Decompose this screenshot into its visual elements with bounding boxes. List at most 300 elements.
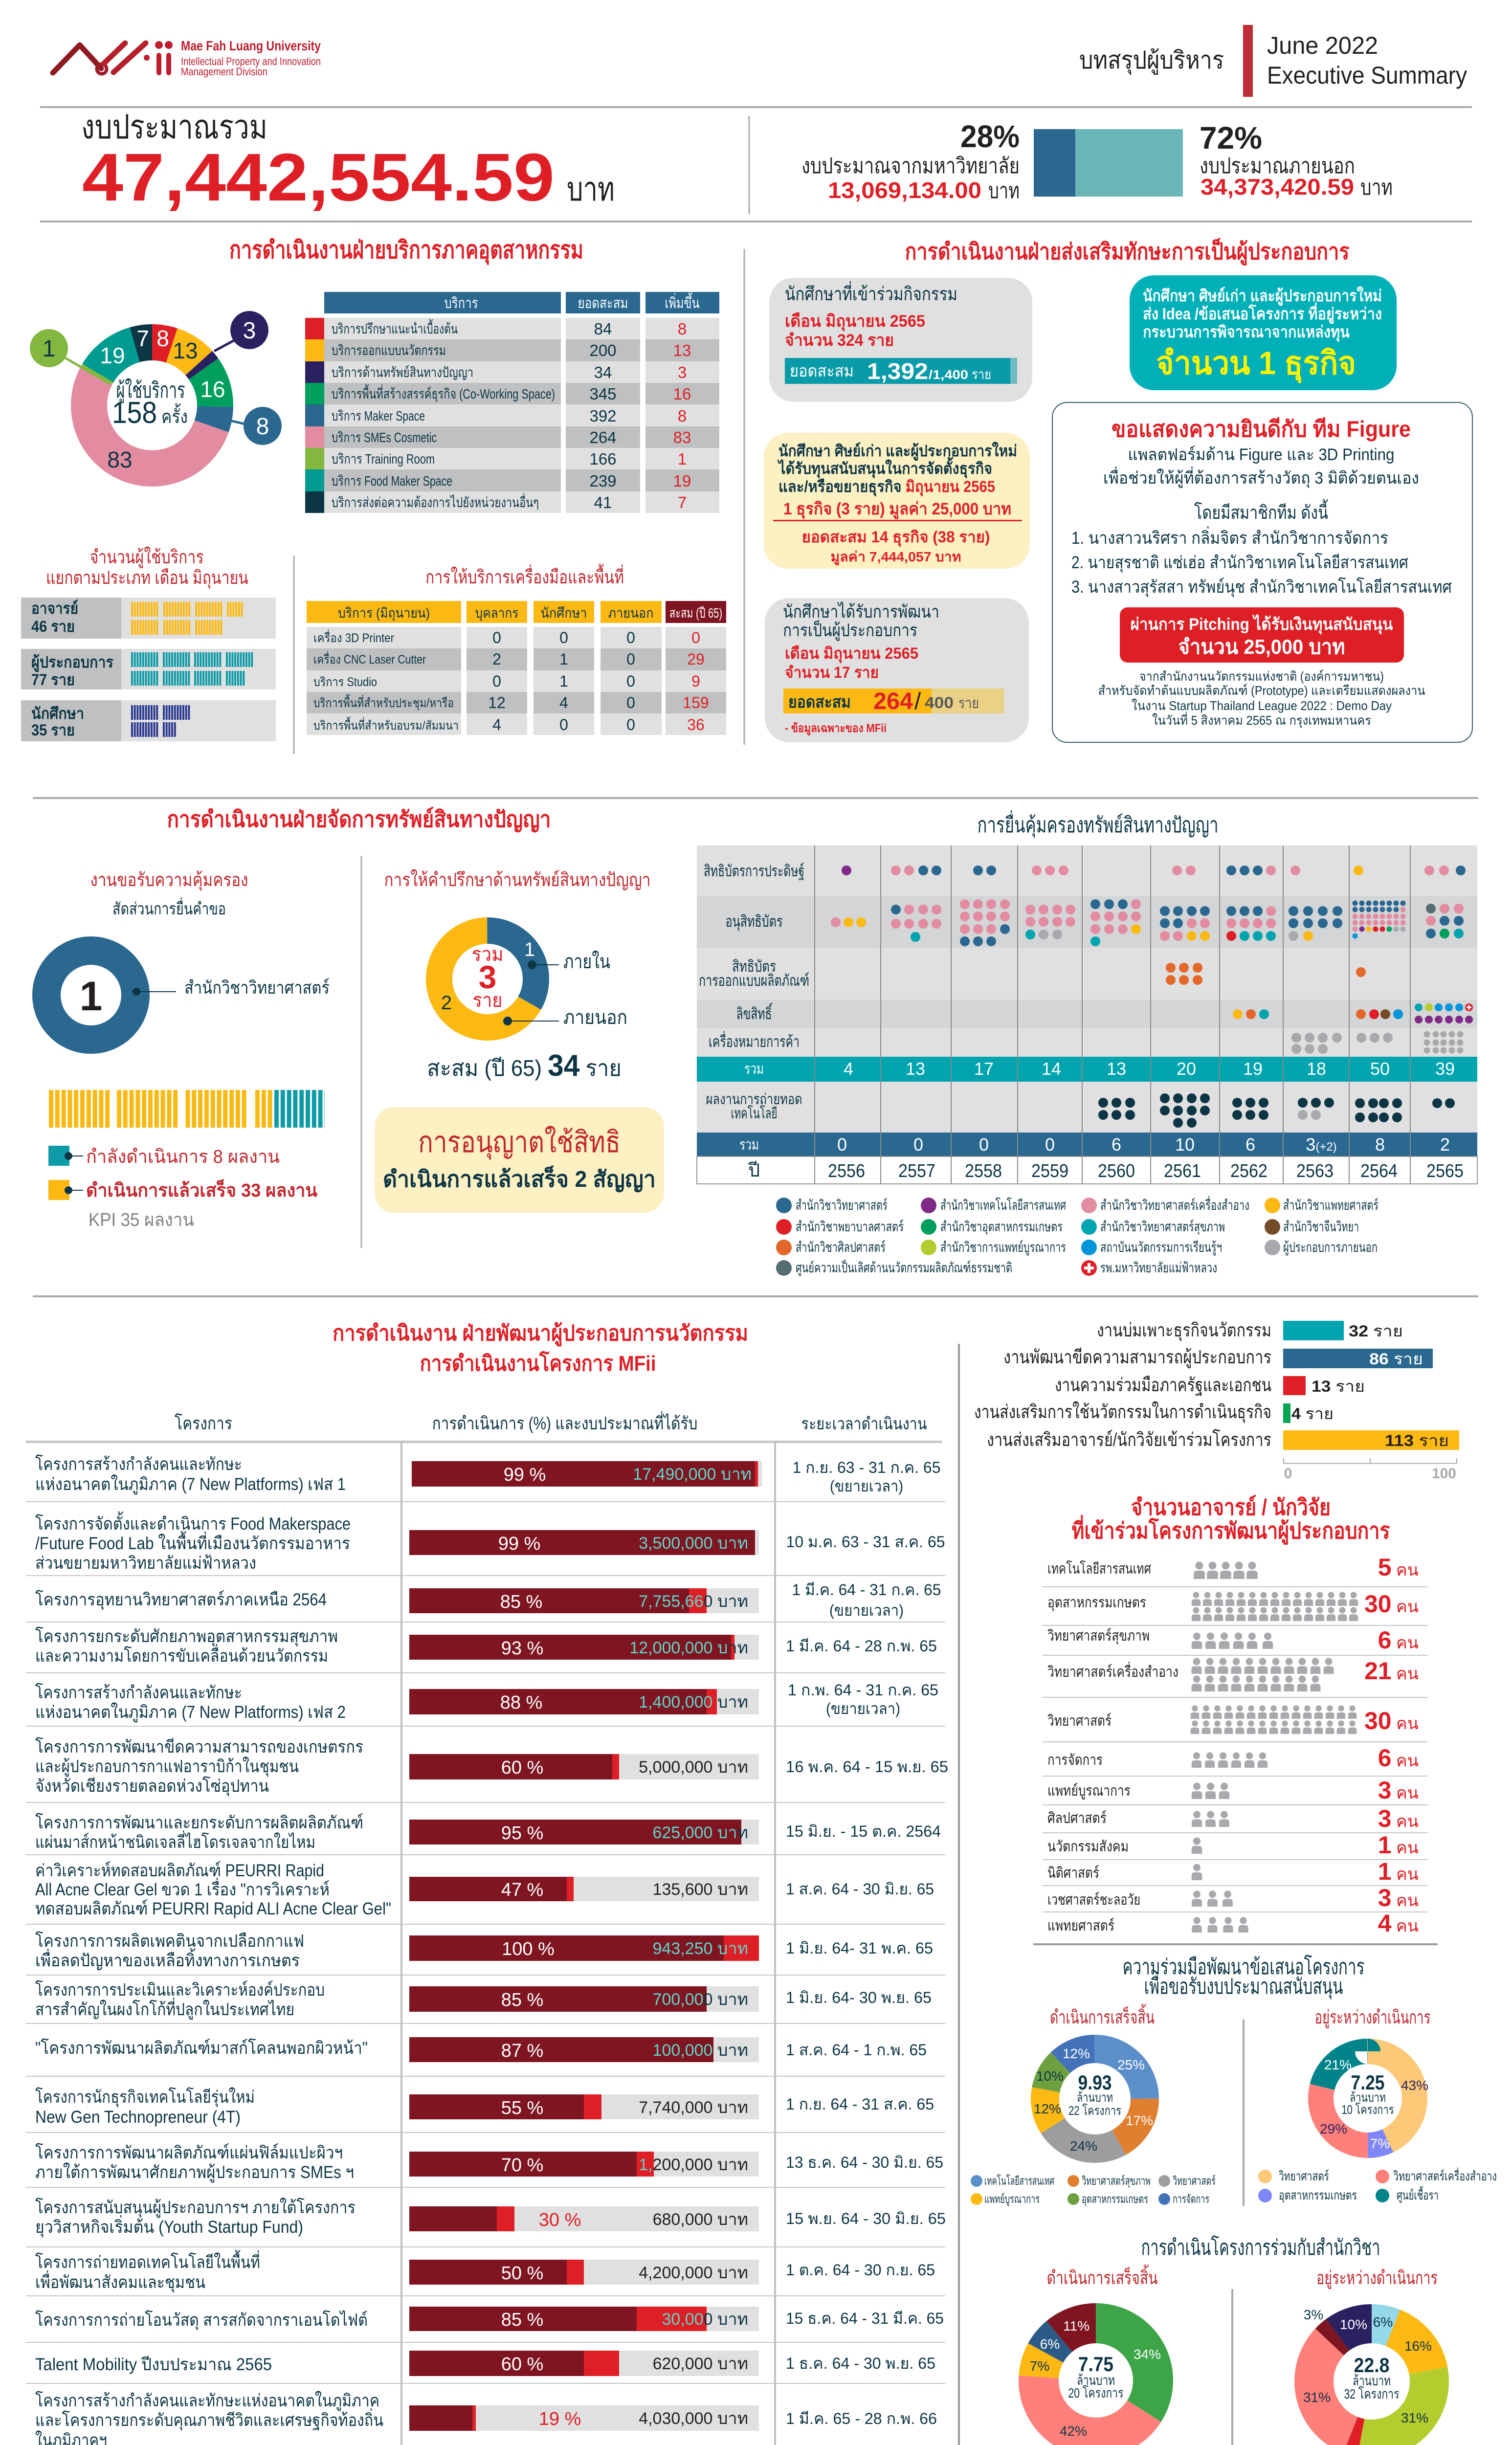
- row: management: การจัดการ: [1047, 1752, 1103, 1768]
- table rows: บริการด้านทรัพย์สินทางปัญญา: [332, 365, 473, 380]
- totals row: transfer: 6: [1245, 1134, 1255, 1155]
- row: management: [1047, 1744, 1419, 1772]
- donut: proposals in progress: 29%: [1320, 2121, 1347, 2136]
- header: report title: [1079, 25, 1467, 97]
- project 12: New Gen Technopreneur (4T): [35, 2108, 241, 2127]
- panel: lecturers and researchers: [1033, 1494, 1438, 1944]
- university budget share: บาท: [988, 179, 1020, 203]
- project 9: โครงการการผลิตเพคตินจากเปลือกกาแฟ: [35, 1931, 304, 1951]
- project 2: 99 %: [498, 1534, 540, 1554]
- year row: 2565: [1426, 1161, 1464, 1181]
- table rows: 8: [678, 407, 687, 425]
- panel: team Figure congratulation: จากสำนักงานนวัตกรรมแห่งชาติ (องค์การมหาชน): [1139, 669, 1384, 684]
- legend: proposals completed: [971, 2174, 1216, 2206]
- rows: 2: [492, 650, 501, 668]
- row: entrepreneurs: ผู้ประกอบการ: [31, 653, 113, 672]
- totals row: transfer: 2: [1440, 1134, 1450, 1155]
- project 2: /Future Food Lab ในพื้นที่เมืองนวัตกรรมอาหาร: [35, 1531, 350, 1553]
- row: cosmetic science: 21 คน: [1364, 1657, 1419, 1685]
- budget split: [801, 119, 1393, 203]
- section heading: industrial services: การดำเนินงานฝ่ายบริการภาคอุตสาหกรรม: [229, 236, 583, 265]
- panel: lecturers and researchers: ที่เข้าร่วมโครงการพัฒนาผู้ประกอบการ: [1072, 1515, 1390, 1545]
- project 6: [35, 1737, 948, 1796]
- project 1: (ขยายเวลา): [830, 1477, 903, 1495]
- year row: 2556: [828, 1161, 865, 1181]
- project table: [26, 1411, 948, 2445]
- column headers: [26, 1411, 942, 1443]
- panel: ideas in funding process: กระบวนการพิจารณาจากแหล่งทุน: [1143, 323, 1350, 342]
- panel: team Figure congratulation: โดยมีสมาชิกทีม ดังนี้: [1194, 499, 1329, 523]
- year row: 2560: [1098, 1161, 1135, 1181]
- project 13: [35, 2143, 943, 2182]
- row labels: สิทธิบัตร: [732, 957, 776, 975]
- project 3: โครงการอุทยานวิทยาศาสตร์ภาคเหนือ 2564: [35, 1590, 327, 1610]
- row labels: ลิขสิทธิ์: [736, 1002, 773, 1022]
- grid lines: [26, 1442, 945, 2445]
- project 17: 60 %: [501, 2354, 543, 2375]
- panel: funded students: 1 ธุรกิจ (3 ราย) มูลค่า 25,000 บาท: [783, 500, 1011, 519]
- bar chart: business support types: งานส่งเสริมอาจารย์/นักวิจัยเข้าร่วมโครงการ: [987, 1429, 1271, 1450]
- donut: joint completed: 7.75: [1078, 2353, 1113, 2376]
- row: entrepreneurs: 77 ราย: [31, 671, 75, 689]
- panel: users by type: [21, 547, 276, 741]
- donut: joint completed: 7%: [1030, 2358, 1049, 2374]
- year row: 2557: [898, 1161, 935, 1181]
- tick bar: works: [49, 1090, 325, 1128]
- rows: 0: [492, 672, 501, 690]
- row: health science: วิทยาศาสตร์สุขภาพ: [1047, 1627, 1150, 1645]
- legend: proposals completed: วิทยาศาสตร์: [1173, 2174, 1216, 2188]
- project 16: 30,000 บาท: [662, 2310, 748, 2329]
- donut: joint in progress: [1303, 2307, 1432, 2445]
- table: tools and space: สะสม (ปี 65): [669, 605, 722, 621]
- totals row: transfer: 3(+2): [1306, 1134, 1337, 1155]
- row: law: [1047, 1858, 1419, 1885]
- legend: proposals completed: วิทยาศาสตร์สุขภาพ: [1082, 2174, 1151, 2188]
- donut: service users: 7: [136, 326, 149, 351]
- donut: proposals in progress: [1320, 2051, 1428, 2151]
- external budget share: 72%: [1200, 120, 1262, 156]
- donut: joint in progress: 31%: [1401, 2410, 1428, 2425]
- totals row: filings: 50: [1370, 1059, 1390, 1079]
- project 17: Talent Mobility ปีงบประมาณ 2565: [35, 2355, 272, 2374]
- legend: proposals in progress: วิทยาศาสตร์: [1279, 2169, 1329, 2183]
- project 13: โครงการการพัฒนาผลิตภัณฑ์แผ่นฟิล์มแปะผิวฯ: [35, 2143, 343, 2162]
- licensing callout: [375, 1107, 664, 1213]
- project 7: 15 มิ.ย. - 15 ต.ค. 2564: [786, 1823, 941, 1840]
- project 5: 1 ก.พ. 64 - 31 ก.ค. 65: [788, 1681, 938, 1699]
- project 3: 1 มี.ค. 64 - 31 ก.ค. 65: [792, 1581, 941, 1599]
- donut: consulting: [439, 931, 627, 1028]
- table: tools and space: นักศึกษา: [541, 605, 587, 621]
- project 10: [35, 1980, 932, 2020]
- donut: joint completed: 11%: [1063, 2318, 1090, 2334]
- project 1: 17,490,000 บาท: [633, 1465, 752, 1484]
- project 16: โครงการการถ่ายโอนวัสดุ สารสกัดจากราเอนโดไฟต์: [35, 2310, 368, 2330]
- project 8: ทดสอบผลิตภัณฑ์ PEURRI Rapid ALI Acne Clear Gel": [35, 1899, 391, 1918]
- ring chart: 1: [80, 973, 102, 1019]
- project 4: [35, 1626, 937, 1666]
- row: social innovation: นวัตกรรมสังคม: [1047, 1839, 1129, 1855]
- donut: joint completed: 6%: [1040, 2336, 1060, 2352]
- project 14: 680,000 บาท: [653, 2210, 748, 2229]
- project 12: [35, 2087, 934, 2127]
- rows: บริการพื้นที่สำหรับอบรม/สัมมนา: [313, 716, 459, 733]
- legend: schools: สำนักวิชาแพทยศาสตร์: [1283, 1198, 1379, 1213]
- project 14: ยุววิสาหกิจเริ่มต้น (Youth Startup Fund): [35, 2215, 303, 2237]
- legend: schools: สำนักวิชาวิทยาศาสตร์: [796, 1198, 888, 1213]
- donut: proposals in progress: ล้านบาท: [1350, 2090, 1386, 2105]
- totals row: filings: 20: [1177, 1059, 1196, 1079]
- panel: student participation: จำนวน 324 ราย: [785, 331, 894, 350]
- table rows: 34: [594, 363, 612, 381]
- panel: team Figure congratulation: ในงาน Startup Thailand League 2022 : Demo Day: [1132, 698, 1392, 713]
- legend: schools: สำนักวิชาพยาบาลศาสตร์: [796, 1219, 904, 1234]
- table rows: 1: [678, 450, 687, 468]
- bar chart: business support types: 86 ราย: [1369, 1350, 1423, 1368]
- rows: เครื่อง 3D Printer: [313, 629, 394, 645]
- donut: proposals completed: 24%: [1070, 2138, 1097, 2154]
- legend: schools: สำนักวิชาวิทยาศาสตร์เครื่องสำอาง: [1100, 1196, 1249, 1213]
- project 1: โครงการสร้างกำลังคนและทักษะ: [35, 1454, 242, 1474]
- totals row: transfer: 10: [1175, 1134, 1195, 1155]
- table: tools and space: การให้บริการเครื่องมือและพื้นที่: [425, 563, 624, 588]
- row: anti-aging medicine: [1047, 1884, 1419, 1912]
- project 5: 1,400,000 บาท: [639, 1693, 748, 1712]
- rows: บริการ Studio: [313, 675, 377, 689]
- project 8: 1 ส.ค. 64 - 30 มิ.ย. 65: [786, 1880, 934, 1898]
- table header: บริการ: [444, 295, 478, 311]
- project 4: 12,000,000 บาท: [629, 1639, 748, 1657]
- table rows: บริการปรึกษาแนะนำเบื้องต้น: [332, 319, 458, 336]
- donut: proposals completed: 25%: [1117, 2057, 1145, 2072]
- legend: schools: ศูนย์ความเป็นเลิศด้านนวัตกรรมผลิตภัณฑ์ธรรมชาติ: [796, 1259, 1012, 1276]
- row labels: รวม: [739, 1137, 759, 1153]
- ring chart: สำนักวิชาวิทยาศาสตร์: [184, 978, 330, 998]
- table rows: 345: [589, 385, 617, 403]
- panel: student entrepreneurs: /: [914, 689, 921, 714]
- project 12: โครงการนักธุรกิจเทคโนโลยีรุ่นใหม่: [35, 2087, 255, 2107]
- project 13: 13 ธ.ค. 64 - 30 มิ.ย. 65: [786, 2154, 943, 2171]
- table header: เพิ่มขึ้น: [665, 292, 699, 311]
- project 6: 60 %: [501, 1757, 543, 1778]
- year row: 2558: [965, 1161, 1002, 1181]
- table rows: บริการ SMEs Cosmetic: [332, 430, 437, 445]
- panel: student entrepreneurs: จำนวน 17 ราย: [785, 664, 879, 681]
- row: medicine: [1047, 1910, 1419, 1937]
- university budget share: [801, 119, 1020, 203]
- legend: schools: สำนักวิชาวิทยาศาสตร์สุขภาพ: [1100, 1219, 1225, 1235]
- panel: student entrepreneurs: - ข้อมูลเฉพาะของ MFii: [785, 722, 887, 735]
- panel: IP consulting: สะสม (ปี 65) 34 ราย: [427, 1049, 622, 1083]
- project 6: 16 พ.ค. 64 - 15 พ.ย. 65: [786, 1758, 948, 1776]
- project 17: 1 ธ.ค. 64 - 30 พ.ย. 65: [786, 2355, 935, 2372]
- table rows: [305, 318, 719, 513]
- row: IT: 5 คน: [1378, 1554, 1419, 1581]
- row: agro-industry: 30 คน: [1364, 1590, 1419, 1618]
- header: MFii logo: Mae Fah Luang University: [181, 38, 321, 53]
- project 15: เพื่อพัฒนาสังคมและชุมชน: [35, 2270, 205, 2292]
- donut: service users: 1: [43, 336, 55, 362]
- table rows: 8: [678, 320, 687, 338]
- row: integrative medicine: [1047, 1777, 1419, 1804]
- row: integrative medicine: 3 คน: [1378, 1777, 1419, 1804]
- project 2: โครงการจัดตั้งและดำเนินการ Food Makerspace: [35, 1511, 351, 1534]
- table rows: 41: [594, 493, 612, 511]
- row: anti-aging medicine: 3 คน: [1378, 1884, 1419, 1912]
- project 8: All Acne Clear Gel ขวด 1 เรื่อง "การวิเคราะห์: [35, 1878, 330, 1899]
- bar chart: business support types: 13 ราย: [1312, 1378, 1365, 1395]
- licensing callout: ดำเนินการแล้วเสร็จ 2 สัญญา: [383, 1165, 656, 1192]
- row: entrepreneurs: [21, 649, 276, 689]
- header: MFii logo: Intellectual Property and Innovation: [181, 55, 321, 67]
- table: service totals: [305, 292, 719, 513]
- table rows: บริการ Food Maker Space: [332, 473, 452, 489]
- donut: service users: 13: [173, 338, 198, 363]
- section heading: intellectual property: การดำเนินงานฝ่ายจัดการทรัพย์สินทางปัญญา: [167, 806, 551, 832]
- section heading: innovation entrepreneur development: [333, 1321, 748, 1376]
- rows: 0: [626, 629, 635, 646]
- panel: proposal collaboration: อยู่ระหว่างดำเนินการ: [1314, 2007, 1431, 2028]
- project 8: [35, 1861, 934, 1918]
- year row: 2564: [1360, 1161, 1398, 1181]
- legend: schools: สำนักวิชาการแพทย์บูรณาการ: [940, 1240, 1066, 1256]
- donut: joint in progress: 6%: [1373, 2314, 1393, 2330]
- project 13: 1,200,000 บาท: [639, 2156, 748, 2174]
- panel: student entrepreneurs: 264: [873, 689, 913, 714]
- row: lecturers: อาจารย์: [31, 600, 78, 617]
- project 2: [35, 1511, 945, 1573]
- rows: บริการพื้นที่สำหรับประชุม/หารือ: [313, 694, 454, 711]
- legend: proposals in progress: อุตสาหกรรมเกษตร: [1279, 2188, 1357, 2203]
- project 2: ส่วนขยายมหาวิทยาลัยแม่ฟ้าหลวง: [35, 1554, 256, 1573]
- table rows: 239: [589, 472, 617, 490]
- row: law: นิติศาสตร์: [1047, 1865, 1099, 1881]
- project 10: โครงการการประเมินและวิเคราะห์องค์ประกอบ: [35, 1980, 325, 2000]
- totals row: filings: 13: [906, 1059, 925, 1079]
- panel: student participation: ราย: [972, 367, 991, 382]
- project 15: 50 %: [501, 2263, 543, 2284]
- donut: proposals completed: 10%: [1036, 2068, 1064, 2084]
- donut: proposals in progress: 7%: [1370, 2136, 1390, 2151]
- licensing callout: การอนุญาตใช้สิทธิ: [418, 1126, 621, 1160]
- panel: student entrepreneurs: การเป็นผู้ประกอบการ: [783, 619, 917, 641]
- external budget share: บาท: [1360, 176, 1393, 200]
- project 3: (ขยายเวลา): [829, 1601, 904, 1619]
- donut: service users: 19: [100, 343, 125, 368]
- donut: joint in progress: 31%: [1303, 2390, 1331, 2405]
- donut: service users: 8: [256, 414, 269, 440]
- donut: proposals completed: ล้านบาท: [1077, 2090, 1113, 2105]
- total budget: [81, 109, 615, 215]
- project 11: 87 %: [501, 2041, 543, 2061]
- bar chart: business support types: งานส่งเสริมการใช้นวัตกรรมในการดำเนินธุรกิจ: [974, 1401, 1271, 1423]
- panel: joint projects with schools: การดำเนินโครงการร่วมกับสำนักวิชา: [1141, 2235, 1380, 2260]
- pitching award: จำนวน 25,000 บาท: [1178, 635, 1345, 658]
- donut: consulting: ราย: [472, 990, 503, 1011]
- donut: service users: 83: [107, 447, 133, 472]
- project 3: 85 %: [500, 1592, 542, 1612]
- project 15: [35, 2249, 935, 2292]
- table: tools and space: ภายนอก: [608, 605, 653, 621]
- header: MFii logo: [53, 38, 321, 78]
- row: liberal arts: ศิลปศาสตร์: [1047, 1810, 1107, 1826]
- donut: service users: 158: [112, 396, 157, 430]
- header: report title: บทสรุปผู้บริหาร: [1079, 46, 1224, 75]
- project 5: โครงการสร้างกำลังคนและทักษะ: [35, 1683, 242, 1702]
- rows: 0: [691, 629, 700, 646]
- row: lecturers: [21, 598, 276, 639]
- row: management: 6 คน: [1378, 1744, 1419, 1772]
- panel: protection applications: งานขอรับความคุ้มครอง: [90, 870, 248, 891]
- donut: joint completed: 42%: [1060, 2423, 1087, 2439]
- rows: 0: [559, 716, 568, 734]
- header: MFii logo: Management Division: [181, 66, 267, 78]
- rows: 36: [687, 716, 705, 734]
- row: social innovation: 1 คน: [1378, 1831, 1419, 1859]
- panel: student participation: ยอดสะสม: [790, 362, 854, 380]
- project 9: เพื่อลดปัญหาของเหลือทิ้งทางการเกษตร: [35, 1948, 300, 1970]
- panel: proposal collaboration: ความร่วมมือพัฒนาข้อเสนอโครงการ: [1123, 1955, 1364, 1979]
- project 3: [35, 1581, 941, 1619]
- row: anti-aging medicine: เวชศาสตร์ชะลอวัย: [1047, 1891, 1140, 1908]
- row: liberal arts: 3 คน: [1378, 1805, 1419, 1832]
- IP filings matrix: การยื่นคุ้มครองทรัพย์สินทางปัญญา: [977, 810, 1219, 838]
- panel: lecturers and researchers: จำนวนอาจารย์ / นักวิจัย: [1131, 1494, 1331, 1520]
- legend: schools: สำนักวิชาเทคโนโลยีสารสนเทศ: [940, 1197, 1066, 1213]
- rows: 0: [559, 629, 568, 646]
- donut: proposals completed: 12%: [1034, 2101, 1061, 2116]
- project 10: 1 มิ.ย. 64- 30 พ.ย. 65: [786, 1989, 932, 2006]
- donut: proposals in progress: 21%: [1324, 2057, 1352, 2072]
- year row: 2563: [1296, 1161, 1334, 1181]
- table rows: 200: [589, 341, 617, 359]
- donut: joint completed: 20 โครงการ: [1068, 2385, 1124, 2401]
- legend: schools: รพ.มหาวิทยาลัยแม่ฟ้าหลวง: [1100, 1260, 1217, 1275]
- row: IT: เทคโนโลยีสารสนเทศ: [1047, 1560, 1151, 1577]
- panel: student entrepreneurs: 400: [925, 694, 954, 711]
- table rows: 83: [673, 428, 691, 446]
- section heading: innovation entrepreneur development: การดำเนินงานโครงการ MFii: [420, 1350, 656, 1376]
- project 12: 1 ก.ย. 64 - 31 ส.ค. 65: [786, 2095, 934, 2113]
- row labels: รวม: [744, 1061, 764, 1077]
- row: integrative medicine: แพทย์บูรณาการ: [1047, 1782, 1131, 1800]
- table rows: บริการพื้นที่สร้างสรรค์ธุรกิจ (Co-Working Space): [332, 384, 555, 402]
- panel: proposal collaboration: ดำเนินการเสร็จสิ้น: [1050, 2003, 1155, 2028]
- row labels: สิทธิบัตรการประดิษฐ์: [704, 862, 804, 881]
- panel: funded students: นักศึกษา ศิษย์เก่า และผู้ประกอบการใหม่: [778, 442, 1017, 461]
- pitching award: [1120, 607, 1404, 663]
- totals row: filings: 18: [1307, 1059, 1326, 1079]
- panel: student entrepreneurs: ราย: [958, 695, 979, 711]
- panel: team Figure congratulation: ในวันที่ 5 สิงหาคม 2565 ณ กรุงเทพมหานคร: [1152, 711, 1371, 728]
- totals row: filings: 39: [1435, 1059, 1455, 1079]
- panel: funded students: มูลค่า 7,444,057 บาท: [830, 549, 961, 565]
- table rows: 16: [673, 385, 691, 403]
- university budget share: 13,069,134.00: [828, 178, 981, 203]
- project 15: 1 ต.ค. 64 - 30 ก.ย. 65: [786, 2261, 935, 2279]
- bar chart: business support types: 0: [1284, 1466, 1292, 1482]
- bar chart: business support types: 100: [1432, 1466, 1456, 1482]
- rows: 0: [492, 629, 501, 646]
- bar chart: business support types: 32 ราย: [1349, 1322, 1403, 1340]
- external budget share: [1200, 120, 1393, 200]
- donut: joint in progress: 22.8: [1354, 2354, 1390, 2377]
- row labels: [699, 862, 809, 1181]
- project 10: สารสำคัญในผงโกโก้ที่ปลูกในประเทศไทย: [35, 1998, 294, 2020]
- donut: consulting: 2: [441, 992, 452, 1014]
- donut: joint completed: [1030, 2318, 1161, 2439]
- project 9: [35, 1931, 933, 1970]
- row: cosmetic science: วิทยาศาสตร์เครื่องสำอาง: [1047, 1662, 1178, 1680]
- panel: ideas in funding process: นักศึกษา ศิษย์เก่า และผู้ประกอบการใหม่: [1143, 286, 1382, 306]
- totals row: transfer: 0: [1045, 1134, 1055, 1155]
- panel: joint projects with schools: ดำเนินการเสร็จสิ้น: [1046, 2264, 1158, 2289]
- project 6: จังหวัดเชียงรายตลอดห่วงโซ่อุปทาน: [35, 1776, 269, 1796]
- panel: users by type: จำนวนผู้ใช้บริการ: [90, 547, 203, 568]
- panel: protection applications: [46, 870, 330, 1230]
- project 16: [35, 2307, 944, 2331]
- donut: consulting: ภายใน: [563, 950, 610, 973]
- donut: proposals in progress: 43%: [1401, 2078, 1428, 2093]
- legend: proposals completed: แพทย์บูรณาการ: [984, 2192, 1040, 2206]
- row: medicine: แพทยศาสตร์: [1047, 1917, 1114, 1934]
- legend: proposals in progress: ศูนย์เชื้อรา: [1397, 2186, 1439, 2203]
- donut: proposals completed: [1034, 2046, 1153, 2154]
- panel: funded students: ได้รับทุนสนับสนุนในการจัดตั้งธุรกิจ: [777, 457, 992, 479]
- rows: 1: [559, 672, 568, 690]
- panel: ideas in funding process: จำนวน 1 ธุรกิจ: [1156, 345, 1356, 383]
- project 14: 30 %: [539, 2210, 581, 2230]
- project 4: และความงามโดยการขับเคลื่อนด้วยนวัตกรรม: [35, 1644, 328, 1666]
- project 10: 700,000 บาท: [653, 1990, 748, 2009]
- row: lecturers: 46 ราย: [31, 618, 75, 635]
- project 11: 1 ส.ค. 64 - 1 ก.พ. 65: [786, 2041, 927, 2059]
- project 7: แผ่นมาส์กหน้าชนิดเจลลี่ไฮโดรเจลจากใยไหม: [35, 1830, 315, 1852]
- panel: team Figure congratulation: 2. นายสุรชาติ แซ่เฮ่อ สำนักวิชาเทคโนโลยีสารสนเทศ: [1071, 553, 1408, 573]
- donut: joint in progress: ล้านบาท: [1353, 2373, 1391, 2388]
- panel: student entrepreneurs: เดือน มิถุนายน 2565: [785, 645, 918, 664]
- dots: technology transfer: [1098, 1093, 1455, 1128]
- bar chart: business support types: งานบ่มเพาะธุรกิจนวัตกรรม: [1097, 1320, 1271, 1341]
- donut: service users: 3: [243, 318, 256, 344]
- donut: service users: [30, 311, 282, 472]
- column headers: โครงการ: [175, 1413, 232, 1433]
- project 9: 943,250 บาท: [653, 1939, 748, 1958]
- totals row: transfer: 0: [979, 1134, 989, 1155]
- donut: service users: ผู้ใช้บริการ: [116, 378, 185, 403]
- project 18: โครงการสร้างกำลังคนและทักษะแห่งอนาคตในภูมิภาค: [35, 2391, 379, 2411]
- row: agro-industry: อุตสาหกรรมเกษตร: [1047, 1595, 1146, 1612]
- total budget: งบประมาณรวม: [81, 109, 267, 146]
- donut: proposals in progress: 10 โครงการ: [1342, 2102, 1394, 2117]
- panel: team Figure congratulation: [1052, 402, 1472, 742]
- panel: funded students: และ/หรือขยายธุรกิจ มิถุนายน 2565: [778, 478, 995, 497]
- legend: proposals completed: การจัดการ: [1173, 2193, 1209, 2206]
- panel: team Figure congratulation: ขอแสดงความยินดีกับ ทีม Figure: [1112, 416, 1411, 442]
- project 8: 47 %: [501, 1880, 543, 1900]
- rows: 0: [626, 672, 635, 690]
- project 2: 10 ม.ค. 63 - 31 ส.ค. 65: [786, 1533, 945, 1551]
- project 17: 620,000 บาท: [653, 2355, 748, 2373]
- row: health science: [1047, 1626, 1419, 1654]
- project 12: 55 %: [501, 2098, 543, 2118]
- column headers: ระยะเวลาดำเนินงาน: [801, 1415, 927, 1433]
- donut: consulting: ภายนอก: [563, 1007, 627, 1028]
- panel: joint projects with schools: อยู่ระหว่างดำเนินการ: [1316, 2268, 1438, 2289]
- row: agro-industry: [1047, 1590, 1419, 1621]
- university budget share: งบประมาณจากมหาวิทยาลัย: [801, 154, 1020, 178]
